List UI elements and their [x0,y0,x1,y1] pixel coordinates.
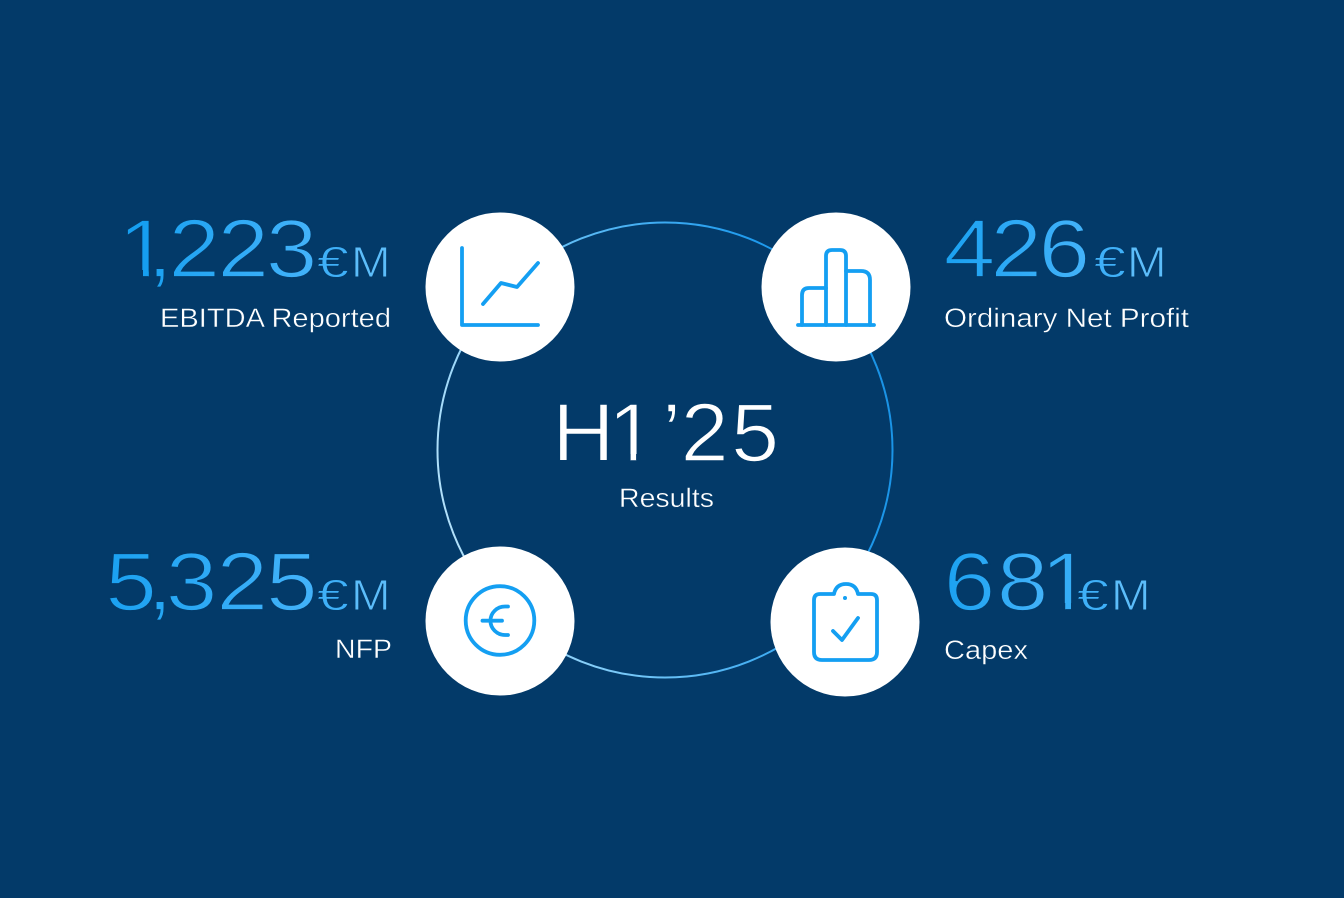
label: Ordinary Net Profit: Ordinary Net Profit [944,303,1190,333]
heading: H1 '25: ’25 [662,386,779,479]
label: EBITDA Reported: EBITDA Reported [160,303,391,333]
metric: Capex [946,553,1146,664]
heading: H1 '25: 1 [608,386,656,479]
icon: euro coin [426,546,574,696]
value: 681: 1 [1040,535,1092,628]
unit: euro: € [1094,237,1126,286]
metric: EBITDA Reported [128,220,390,332]
unit: M: M [1111,571,1151,620]
value: 5,325: 5,325 [105,535,318,628]
unit: M: M [351,571,391,620]
label: NFP: NFP [335,634,392,664]
heading: H1 '25 [560,404,775,462]
icon: bar chart [762,212,910,362]
metric: NFP [105,535,392,664]
unit: M: M [1127,238,1167,287]
metric: Ordinary Net Profit [944,202,1190,333]
unit: euro: € [317,237,349,286]
heading: H1 '25: H [552,386,615,479]
icon: clipboard with check [770,548,920,696]
value: 1,223 [128,220,312,287]
center title [560,404,775,508]
unit: M: M [351,238,391,287]
value: 1,223: ,223 [147,202,317,295]
icon: line chart [426,212,574,362]
value: 426: 426 [944,202,1090,295]
label: Capex: Capex [944,635,1029,665]
unit: euro: € [1077,570,1109,619]
value: 681: 68 [944,535,1049,628]
value: 1,223: 1 [118,202,170,295]
unit: euro: € [317,570,349,619]
ring connecting the four metrics [438,222,892,678]
subheading: Results: Results [619,483,714,513]
value: 681 [949,553,1072,610]
